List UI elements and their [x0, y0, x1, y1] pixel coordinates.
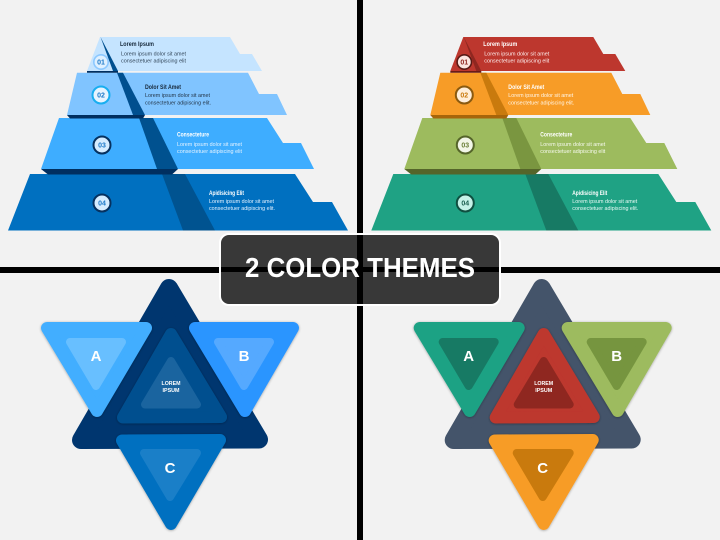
center triangle blue: LOREM — [162, 381, 180, 387]
dark star triangle slate — [454, 288, 632, 440]
tier 4 green — [371, 174, 711, 230]
tier 4 green: consectetuer adipiscing elit. — [572, 206, 639, 212]
tier 4 blue: Apidisicing Elit — [209, 191, 244, 197]
tier 4 green: 04 — [461, 200, 469, 208]
triangle A blue: A — [91, 348, 102, 365]
panel: multicolor star diagram — [420, 288, 666, 524]
triangle B blue — [195, 328, 293, 411]
triangle C blue — [122, 440, 220, 524]
tier 4 green: Lorem ipsum dolor sit amet — [572, 199, 638, 205]
tier 4 blue: Lorem ipsum dolor sit amet — [209, 199, 274, 205]
tier 1 red: Lorem ipsum dolor sit amet — [484, 52, 550, 58]
panel: multicolor pyramid — [371, 37, 711, 230]
tier 3 blue: consectetuer adipiscing elit — [177, 149, 242, 155]
tier 1 red: consectetuer adipiscing elit — [484, 58, 550, 64]
tier 1 red: Lorem Ipsum — [483, 42, 517, 48]
tier 4 blue: consectetuer adipiscing elit. — [209, 206, 275, 212]
center triangle blue — [123, 334, 221, 418]
tier 3 blue: Lorem ipsum dolor sit amet — [177, 142, 242, 148]
center triangle red: IPSUM — [535, 388, 552, 394]
tier 2 orange: 02 — [460, 92, 468, 100]
tier 2 blue: consectetuer adipiscing elit. — [145, 100, 211, 106]
triangle A green — [420, 328, 519, 411]
center triangle red: LOREM — [534, 381, 553, 387]
panel: blue pyramid — [8, 37, 348, 230]
tier 3 olive: 03 — [461, 142, 469, 150]
tier 2 orange: Dolor Sit Amet — [508, 85, 544, 91]
center triangle blue: IPSUM — [162, 388, 180, 394]
panel: blue star diagram — [47, 288, 293, 524]
tier 1 red: 01 — [460, 60, 468, 66]
tier 2 orange: Lorem ipsum dolor sit amet — [508, 93, 574, 99]
tier 3 blue: 03 — [98, 142, 106, 150]
tier 3 olive — [404, 118, 677, 174]
tier 1 red — [450, 37, 625, 73]
tier 4 green: Apidisicing Elit — [572, 191, 607, 197]
tier 1 blue: Lorem ipsum dolor sit amet — [121, 52, 186, 58]
tier 2 blue: 02 — [97, 92, 105, 100]
tier 1 blue: Lorem Ipsum — [120, 42, 154, 48]
tier 3 olive: consectetuer adipiscing elit — [540, 149, 606, 155]
tier 3 blue: Consecteture — [177, 132, 210, 138]
tier 1 blue: consectetuer adipiscing elit — [121, 58, 186, 64]
triangle C orange: C — [537, 460, 548, 477]
triangle B blue: B — [239, 348, 250, 365]
tier 2 orange: consectetuer adipiscing elit. — [508, 100, 575, 106]
tier 2 orange — [430, 73, 650, 118]
triangle C orange — [495, 440, 593, 524]
triangle A blue — [47, 328, 146, 411]
dark star triangle blue — [81, 288, 259, 440]
tier 2 blue: Dolor Sit Amet — [145, 85, 181, 91]
triangle A green: A — [463, 348, 474, 365]
triangle C blue: C — [165, 460, 176, 477]
tier 1 blue: 01 — [97, 60, 105, 66]
tier 3 olive: Consecteture — [540, 132, 573, 138]
triangle B olive: B — [611, 348, 622, 365]
tier 4 blue — [8, 174, 348, 230]
tier 3 blue — [41, 118, 314, 174]
center triangle red — [496, 334, 594, 418]
badge: 2 color themes: 2 COLOR THEMES — [245, 252, 475, 283]
triangle B olive — [568, 328, 666, 411]
tier 1 blue — [87, 37, 262, 73]
tier 4 blue: 04 — [98, 200, 106, 208]
tier 3 olive: Lorem ipsum dolor sit amet — [540, 142, 606, 148]
tier 2 blue: Lorem ipsum dolor sit amet — [145, 93, 210, 99]
tier 2 blue — [67, 73, 287, 118]
